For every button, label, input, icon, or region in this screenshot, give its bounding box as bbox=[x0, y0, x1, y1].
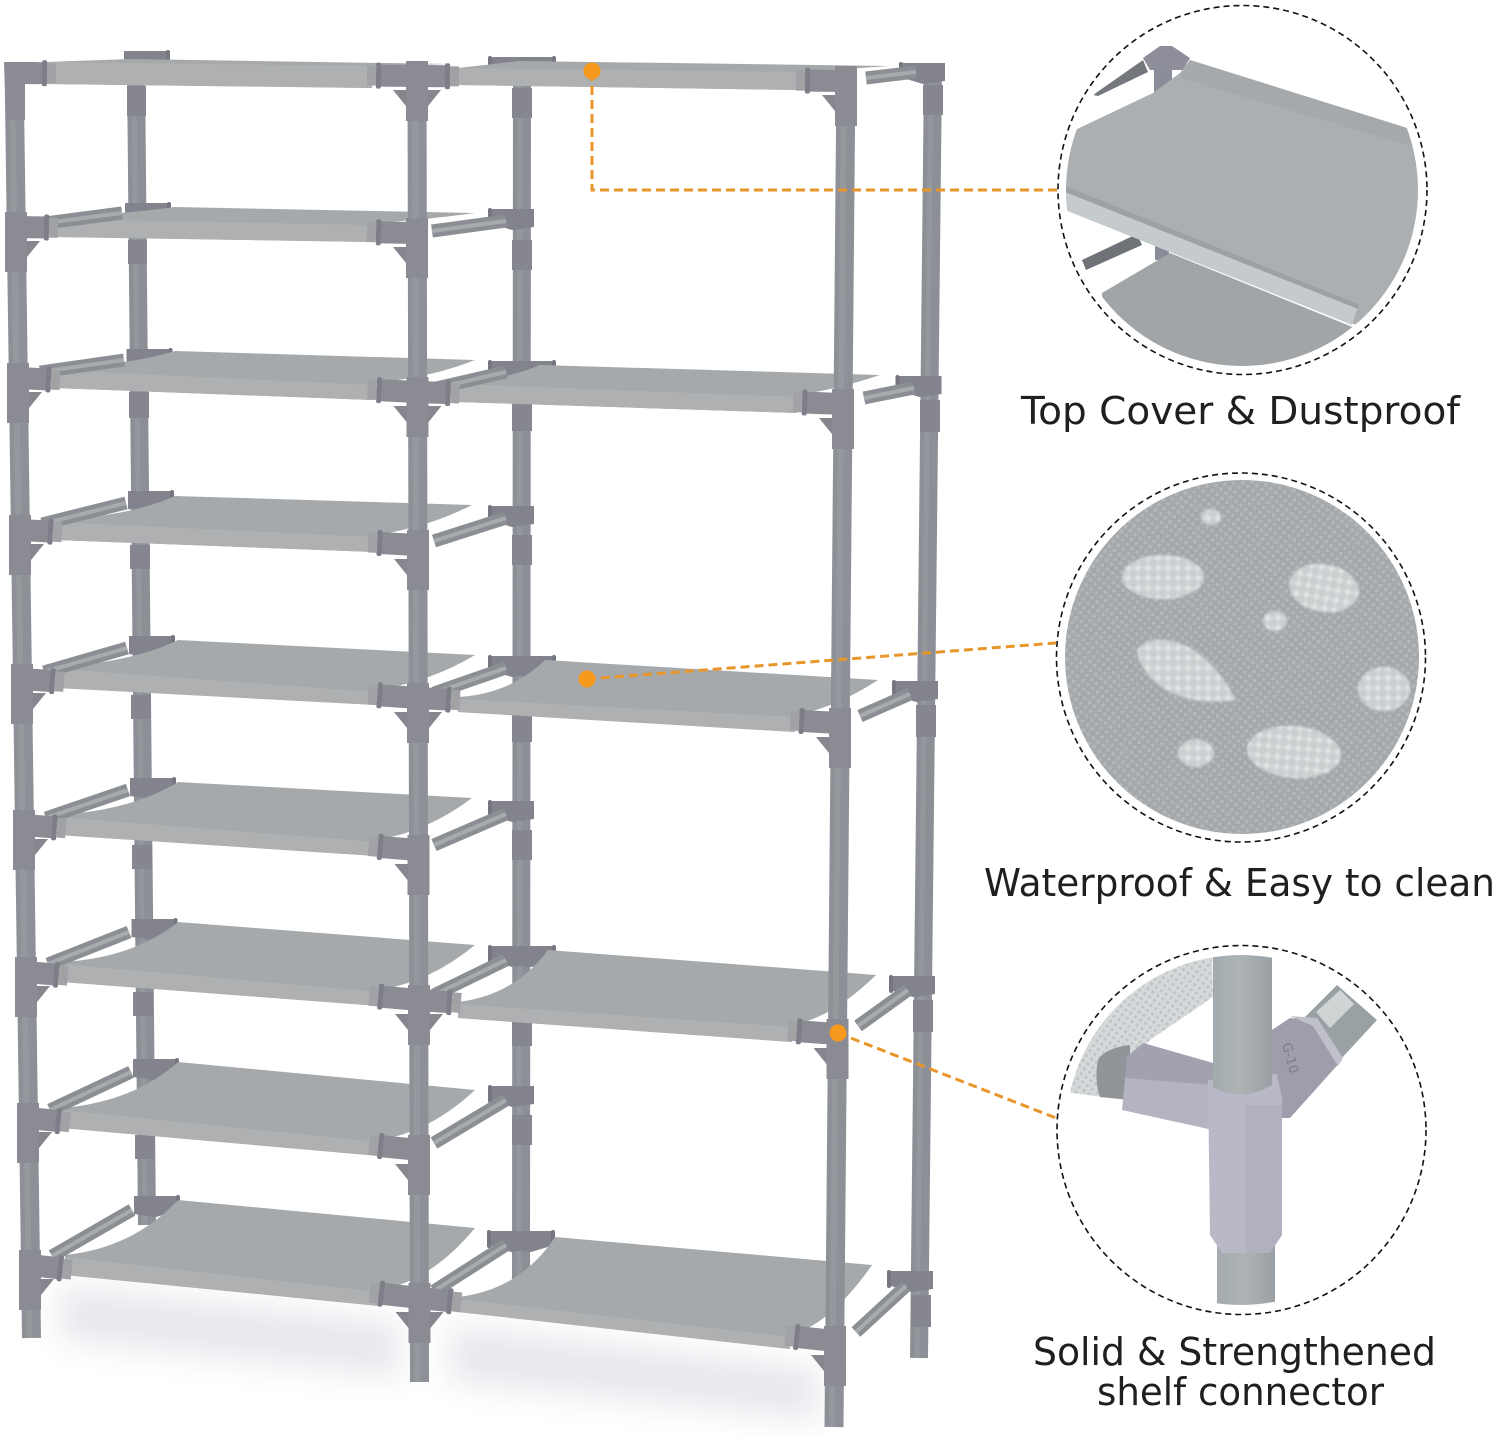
back pole sleeves bbox=[127, 85, 943, 1327]
label: waterproof: Waterproof & Easy to clean bbox=[984, 861, 1495, 905]
side rails bbox=[38, 72, 916, 1332]
lower rail bbox=[1082, 234, 1142, 270]
callout line: top cover bbox=[584, 62, 1057, 190]
front connectors bbox=[4, 60, 857, 1386]
shelf fabric panels bbox=[45, 59, 890, 1349]
connector label: G-10 bbox=[1278, 1041, 1301, 1075]
shelf fabric close-up bbox=[1070, 958, 1213, 1096]
shelf rack bbox=[4, 50, 945, 1427]
water droplets bbox=[1122, 509, 1410, 782]
front poles bbox=[12, 64, 846, 1427]
rear arm bbox=[1272, 1018, 1342, 1118]
floor shadow bbox=[60, 1285, 820, 1420]
rolled front edge bbox=[1060, 186, 1358, 325]
lower pipe bbox=[1217, 1245, 1275, 1307]
top rail and corner bbox=[1093, 46, 1190, 96]
shelf front rolled edges bbox=[45, 62, 800, 1349]
detail circle: waterproof fabric bbox=[1056, 473, 1426, 842]
back poles bbox=[134, 60, 933, 1358]
label: connector: shelf connector bbox=[1097, 1370, 1384, 1414]
callout line: waterproof bbox=[578, 643, 1056, 688]
callout line: connector bbox=[830, 1024, 1056, 1118]
sleeve bbox=[1208, 1074, 1282, 1253]
fabric cover bbox=[1066, 60, 1418, 324]
detail circle: shelf connector bbox=[1050, 946, 1426, 1314]
rear tube bbox=[1300, 985, 1377, 1060]
detail circle: top cover bbox=[1057, 4, 1428, 376]
vertical pipe bbox=[1213, 950, 1272, 1095]
tube inside left arm bbox=[1096, 1045, 1130, 1100]
label: connector: Solid & Strengthened bbox=[1033, 1330, 1436, 1374]
left arm bbox=[1122, 1043, 1213, 1130]
back connectors bbox=[124, 50, 945, 1292]
lower shelf bbox=[1102, 253, 1352, 366]
label: top cover: Top Cover & Dustproof bbox=[1020, 389, 1462, 433]
